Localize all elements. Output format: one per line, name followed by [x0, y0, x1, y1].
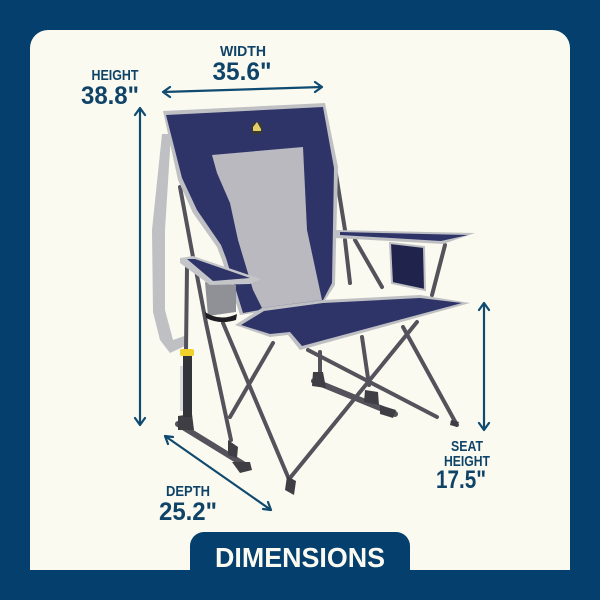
chair illustration	[152, 103, 475, 495]
seat	[235, 295, 470, 350]
label: depth	[159, 483, 217, 526]
label: width	[212, 43, 272, 86]
label: seat height: SEAT	[451, 438, 483, 455]
mesh panel	[212, 147, 322, 308]
arrow: seat height	[479, 303, 489, 430]
label: width: WIDTH	[220, 43, 266, 60]
label: height: HEIGHT	[92, 67, 138, 84]
yellow pole	[180, 349, 194, 417]
label: depth: DEPTH	[166, 483, 210, 500]
label: seat height: 17.5"	[436, 466, 486, 494]
chair back	[163, 103, 338, 315]
right armrest	[335, 230, 475, 244]
label: seat height: HEIGHT	[444, 453, 490, 470]
logo	[252, 122, 262, 134]
label: width: 35.6"	[212, 58, 272, 86]
carry strap	[152, 134, 187, 353]
chair frame	[178, 168, 457, 484]
label: height: 38.8"	[81, 82, 139, 110]
label: seat height	[436, 438, 490, 494]
arrow: width	[163, 82, 322, 97]
feet and rocker brackets	[178, 372, 459, 495]
side pocket	[390, 243, 425, 290]
label: depth: 25.2"	[159, 498, 217, 526]
label: height	[81, 67, 139, 110]
left armrest	[180, 256, 261, 285]
cup holder	[205, 282, 237, 322]
arrow: depth	[165, 436, 271, 510]
arrow: height	[135, 108, 145, 425]
title tab	[190, 532, 410, 573]
title tab: DIMENSIONS	[215, 542, 385, 573]
